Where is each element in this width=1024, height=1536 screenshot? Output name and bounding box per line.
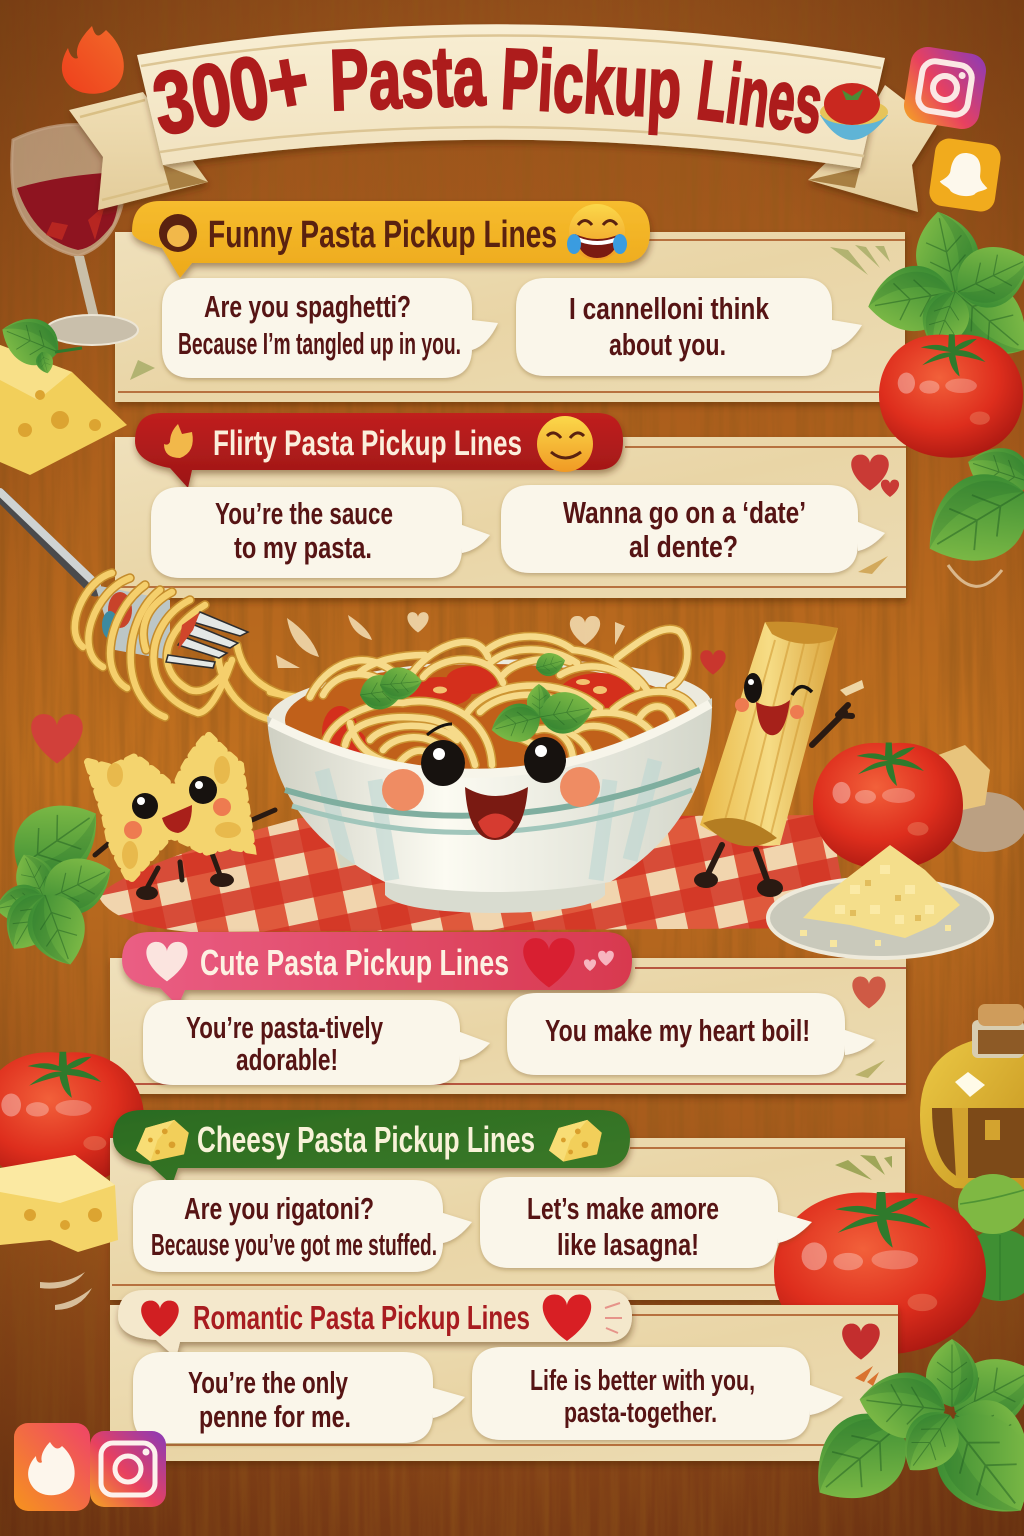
basil top right — [863, 205, 1024, 376]
icon: heart left — [141, 1301, 179, 1337]
title text: Pickup — [499, 31, 684, 136]
pill: cute heading — [122, 932, 632, 1006]
tomato chunks — [322, 666, 640, 761]
panel: cute — [110, 958, 906, 1094]
panel: cheesy — [110, 1138, 905, 1300]
icon: smiling emoji — [537, 416, 593, 472]
title text: Pasta — [328, 28, 487, 129]
bowl body — [267, 698, 712, 892]
basil right middle — [908, 438, 1024, 585]
bubble: cheesy 2: Let’s make amore — [527, 1191, 719, 1226]
title text — [146, 28, 827, 154]
bubble: funny 2: I cannelloni think — [569, 291, 770, 326]
bowl foot — [385, 870, 605, 913]
icon: pale heart — [146, 942, 188, 981]
cheese block left — [0, 1155, 118, 1252]
small cream hearts and splashes above bowl — [276, 612, 625, 668]
bubble: cute 1: adorable! — [236, 1042, 338, 1077]
cheese top left — [0, 308, 127, 475]
bubble: flirty 2: Wanna go on a ‘date’ — [563, 495, 806, 530]
bubble: romantic 2: pasta-together. — [564, 1397, 717, 1429]
cheesy heading text: Cheesy Pasta Pickup Lines — [197, 1119, 535, 1160]
bubble: cheesy 1: Because you’ve got me stuffed. — [151, 1227, 437, 1262]
flirty heading text: Flirty Pasta Pickup Lines — [213, 424, 522, 463]
basil garnish — [487, 684, 597, 748]
instagram icon bottom — [90, 1431, 166, 1507]
bubble: romantic 2 — [472, 1347, 843, 1440]
icon: funny face — [159, 214, 197, 252]
olive oil bottle — [920, 1004, 1024, 1192]
bubble: cheesy 1 — [133, 1180, 472, 1272]
tomato bottom left — [0, 1052, 144, 1186]
pill: cheesy heading — [113, 1110, 630, 1185]
bubble: funny 1: Are you spaghetti? — [204, 289, 411, 324]
tomato top right — [879, 334, 1023, 458]
title banner — [69, 24, 937, 212]
fork with twirled spaghetti — [0, 492, 420, 722]
bubble: romantic 1 — [133, 1352, 465, 1443]
bubble: romantic 1: penne for me. — [199, 1399, 351, 1434]
bowl interior and sauce — [266, 652, 714, 772]
wine glass — [12, 125, 138, 345]
grated cheese plate — [768, 845, 992, 958]
bubble: flirty 1: You’re the sauce — [215, 496, 393, 531]
bubble: cute 1 — [143, 1000, 490, 1085]
pill: romantic heading — [118, 1290, 632, 1358]
icon: cheese left — [136, 1120, 189, 1162]
bubble: cute 2: You make my heart boil! — [545, 1013, 810, 1048]
smile doodle right — [948, 565, 1002, 586]
panel: romantic — [110, 1305, 898, 1461]
bubble: flirty 2 — [501, 485, 885, 573]
basil right of cheesy — [958, 1174, 1024, 1301]
icon: laughing emoji — [567, 204, 627, 260]
panel: funny — [115, 232, 905, 402]
rigatoni character — [694, 622, 864, 897]
large tomato right — [774, 1192, 986, 1355]
panel: flirty — [115, 437, 906, 598]
bubble: flirty 1 — [151, 487, 490, 578]
icon: heart right — [543, 1295, 591, 1341]
basil on cheese — [0, 308, 82, 375]
bowl rim and stripes — [270, 704, 710, 880]
spaghetti bowl character — [266, 629, 714, 913]
fork tines — [166, 612, 248, 668]
banner ribbon — [137, 24, 885, 168]
bubble: flirty 1: to my pasta. — [234, 530, 372, 565]
bubble: cheesy 1: Are you rigatoni? — [184, 1191, 374, 1226]
bubble: romantic 2: Life is better with you, — [530, 1365, 755, 1397]
icon: cheese right — [549, 1120, 602, 1162]
checkered tablecloth — [98, 815, 850, 932]
tinder icon bottom — [14, 1423, 90, 1511]
pill: flirty heading — [135, 413, 623, 488]
bowl face — [382, 724, 600, 840]
banner left tail — [69, 92, 208, 210]
bubble: cheesy 2: like lasagna! — [557, 1227, 699, 1262]
icon: pasta bowl in title — [820, 83, 888, 140]
red heart near rigatoni — [700, 650, 726, 675]
icon: small hearts — [584, 951, 614, 971]
title text: 300+ — [146, 29, 316, 154]
spaghetti — [310, 629, 695, 765]
bubble: cheesy 2 — [480, 1177, 812, 1268]
bubble: cute 2 — [507, 993, 875, 1075]
basil left of cloth — [0, 784, 122, 974]
icon: red heart — [523, 938, 575, 988]
icon: flirty flame — [164, 424, 193, 458]
banner right tail — [808, 85, 937, 212]
bubble: funny 1: Because I’m tangled up in you. — [178, 326, 461, 361]
bubble: cute 1: You’re pasta-tively — [186, 1010, 384, 1045]
snapchat icon — [928, 137, 1002, 213]
bubble: flirty 2: al dente? — [629, 529, 738, 564]
basil bottom right — [794, 1339, 1024, 1536]
red heart left — [31, 714, 83, 764]
instagram icon top right — [902, 45, 988, 131]
romantic heading text: Romantic Pasta Pickup Lines — [193, 1299, 530, 1336]
bubble: funny 1 — [162, 278, 498, 378]
tomato and cheese block right of bowl — [813, 742, 1024, 870]
pill: funny heading — [132, 201, 650, 278]
farfalle character — [88, 735, 275, 900]
funny heading text: Funny Pasta Pickup Lines — [208, 214, 557, 256]
title text: Lines — [693, 43, 827, 151]
swoosh marks left — [40, 1272, 92, 1310]
bubble: romantic 1: You’re the only — [188, 1365, 349, 1400]
bubble: funny 2: about you. — [609, 327, 726, 362]
cute heading text: Cute Pasta Pickup Lines — [200, 942, 509, 983]
bubble: funny 2 — [516, 278, 862, 376]
tinder flame icon — [62, 26, 124, 94]
